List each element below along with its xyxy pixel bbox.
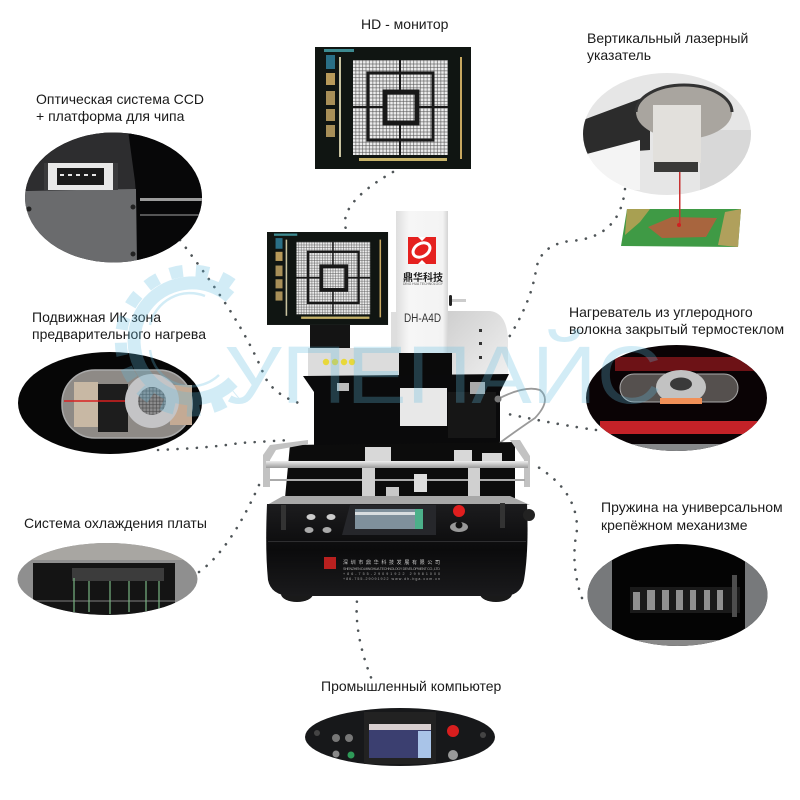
title: HD monitor label: HD - монитор (361, 16, 449, 32)
label: laser pointer: указатель (587, 47, 651, 63)
touchscreen (342, 505, 436, 535)
label: carbon fibre heater: Нагреватель из углеродного (569, 304, 753, 320)
PCB rail frame (263, 440, 530, 502)
icon: laser target board (621, 172, 741, 247)
company plate: +86-755-29091922 29981000 (343, 572, 440, 576)
panel: spring photo (585, 542, 770, 648)
small monitor (267, 232, 388, 325)
tower with logo: DING HUA TECHNOLOGY (403, 282, 444, 286)
label: laser pointer: Вертикальный лазерный (587, 30, 748, 46)
company plate: 深圳市鼎华科技发展有限公司 (343, 559, 440, 566)
machine: BGA rework station (263, 211, 545, 602)
feet (281, 586, 313, 602)
control strip with yellow lights (308, 348, 399, 376)
label: spring on universal fixture: Пружина на универсальном (601, 499, 783, 515)
label: CCD optical system: Оптическая система CCD (36, 91, 204, 107)
gooseneck lamp (497, 389, 545, 445)
label: movable IR preheat zone: Подвижная ИК зона (32, 309, 161, 325)
watermark: gear and brand name (121, 271, 662, 421)
panel: HD monitor photo (315, 47, 471, 169)
tower with logo: DH-A4D (404, 313, 441, 325)
label: spring on universal fixture: крепёжном механизме (601, 517, 748, 533)
tower with logo (391, 211, 466, 358)
panel: laser pointer photo (580, 70, 755, 200)
panel: IR preheat photo (15, 350, 205, 456)
watermark: gear and brand name: УПЕПАЙС (224, 329, 662, 421)
right housing (448, 311, 508, 376)
company plate: +86-755-29091922 www.dh-bga.com.cn (343, 577, 440, 581)
panel: heater photo (584, 343, 770, 454)
base controls (268, 503, 535, 542)
head opening (399, 353, 452, 376)
panel: CCD photo (25, 132, 202, 262)
base top slope (267, 496, 530, 505)
panel: cooling photo (18, 543, 198, 615)
black base (266, 504, 528, 596)
label: board cooling system: Система охлаждения платы (24, 515, 207, 531)
tower with logo: 鼎华科技 (403, 271, 443, 284)
label: CCD optical system: + платформа для чипа (36, 108, 185, 124)
label: movable IR preheat zone: предварительного нагрева (32, 326, 206, 342)
label: industrial computer: Промышленный компьютер (321, 678, 502, 694)
lower black plate (285, 442, 515, 498)
gear icon (121, 271, 236, 411)
label: carbon fibre heater: волокна закрытый термостеклом (569, 321, 784, 337)
black upper body (303, 374, 509, 445)
monitor stem (310, 325, 350, 348)
company plate (324, 557, 440, 581)
dotted leader lines (158, 172, 625, 680)
company plate: SHENZHEN D-MINGHUA TECHNOLOGY DEVELOPMENT CO., LTD (343, 567, 440, 571)
panel: industrial computer photo (304, 706, 498, 768)
